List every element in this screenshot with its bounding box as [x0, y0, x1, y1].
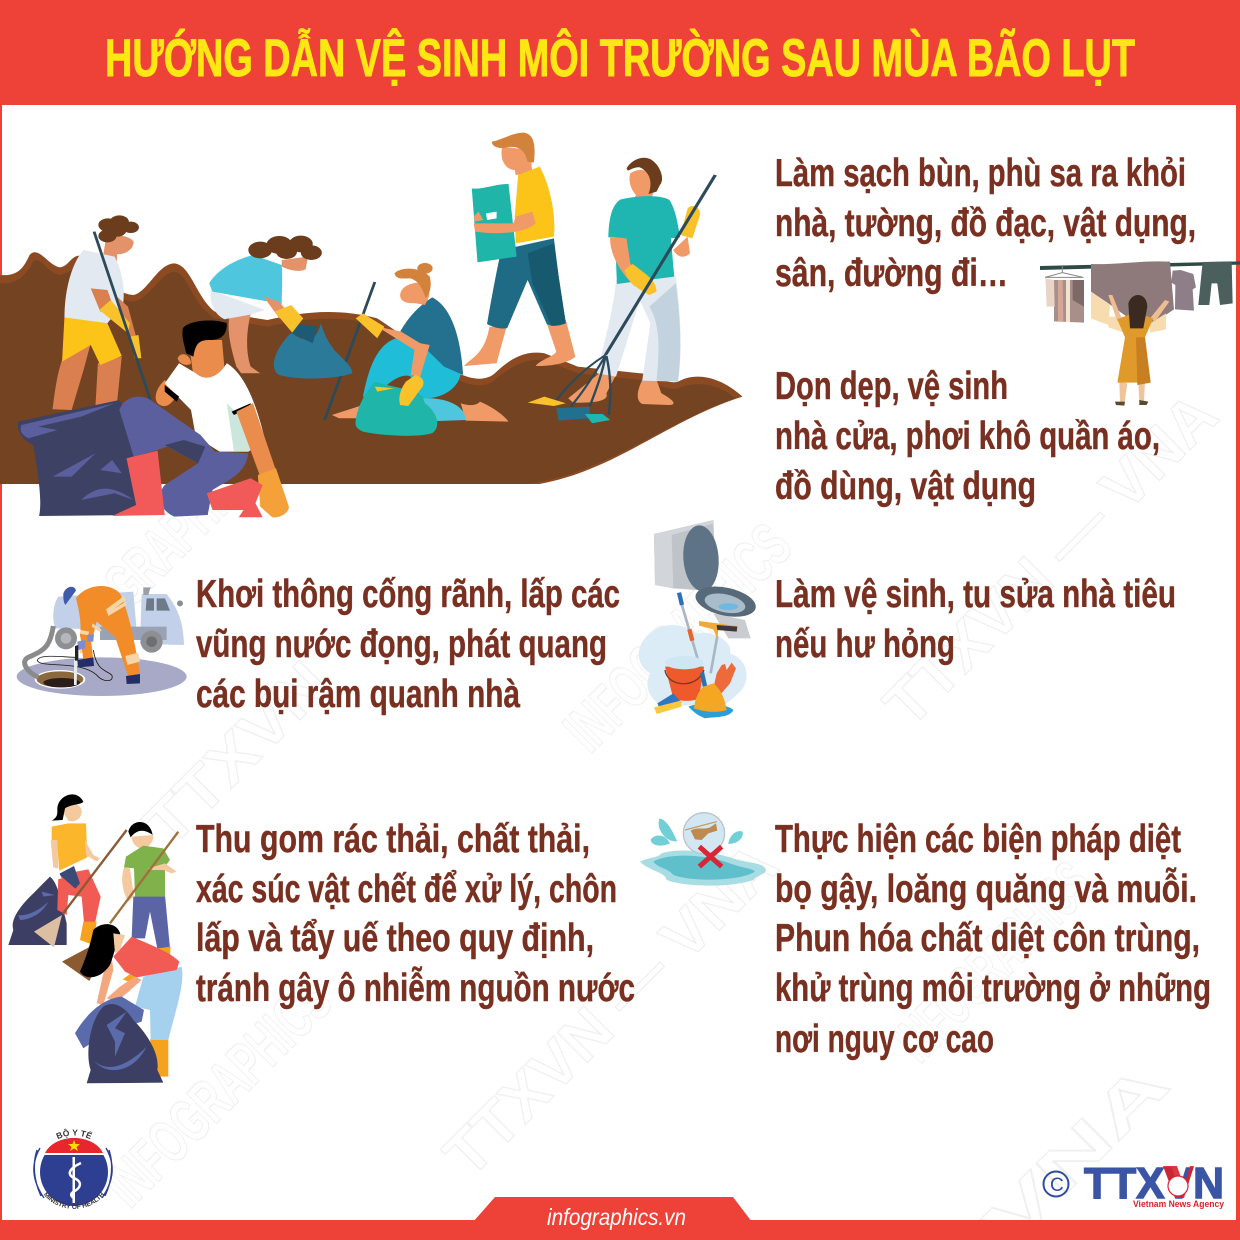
illustration: people cleaning mud — [0, 133, 743, 517]
text: clear drains: các bụi rậm quanh nhà — [196, 673, 520, 716]
text: collect waste: Thu gom rác thải, chất thải, — [196, 818, 590, 861]
icon: larva in puddle with red cross — [640, 813, 766, 886]
text: tidy house — [775, 365, 1160, 508]
icon: toilet and cleaning tools — [639, 520, 759, 718]
woman with bag — [75, 924, 182, 1083]
text: clean mud: sân, đường đi… — [775, 252, 1008, 295]
logo: Ministry of Health: BỘ Y TẾ — [56, 1128, 93, 1140]
text: kill larvae and mosquitoes: nơi nguy cơ cao — [775, 1018, 994, 1061]
watermarks — [91, 380, 1231, 1240]
watermarks: TTXVN — VNA — [431, 830, 791, 1190]
woman with broom — [8, 794, 127, 947]
logo: TTXVN: TTXVN — [1084, 1159, 1224, 1208]
man with broom — [62, 822, 178, 981]
watermarks: TTXVN — VNA — [871, 380, 1231, 740]
text: collect waste: lấp và tẩy uế theo quy định, — [196, 917, 594, 960]
logo: TTXVN: Vietnam News Agency — [1133, 1199, 1224, 1209]
watermarks: INFOGRAPHICS — [551, 511, 805, 765]
text: tidy house: đồ dùng, vật dụng — [775, 465, 1036, 508]
person front: man with black bag — [18, 320, 289, 517]
text: clear drains — [196, 573, 620, 716]
text: tidy house: Dọn dẹp, vệ sinh — [775, 365, 1008, 408]
icon: sewer worker and truck — [17, 586, 187, 696]
text: clean mud — [775, 152, 1196, 295]
text: collect waste — [196, 818, 635, 1010]
person 5: rake — [528, 158, 715, 423]
person 4: carrying bag — [464, 133, 575, 366]
text: repair latrine — [775, 573, 1176, 666]
logo: TTXVN: C — [1050, 1175, 1064, 1196]
watermarks: INFOGRAPHICS — [91, 966, 345, 1220]
watermarks: TTXVN — [131, 648, 343, 860]
logo: Ministry of Health — [33, 1128, 113, 1209]
icon: woman drying clothes — [1040, 261, 1240, 406]
footer url: infographics.vn — [547, 1204, 686, 1230]
text: clear drains: vũng nước đọng, phát quang — [196, 623, 607, 666]
person 2: bending with bag — [209, 236, 352, 379]
watermarks: GRAPHICS — [91, 437, 274, 620]
person 1: standing with stick — [53, 215, 150, 410]
mud ground — [0, 252, 743, 484]
icon: people collecting garbage — [8, 794, 182, 1083]
text: kill larvae and mosquitoes — [775, 818, 1211, 1061]
footer band and tab — [0, 1197, 1240, 1240]
text: collect waste: xác súc vật chết để xử lý, chôn — [196, 868, 617, 911]
logo: Ministry of Health: MINISTRY OF HEALTH — [44, 1192, 104, 1209]
text: repair latrine: nếu hư hỏng — [775, 623, 955, 666]
text: collect waste: tránh gây ô nhiễm nguồn nước — [196, 966, 635, 1010]
person 3: crouching with bag — [325, 263, 509, 436]
text: clear drains: Khơi thông cống rãnh, lấp các — [196, 573, 620, 616]
